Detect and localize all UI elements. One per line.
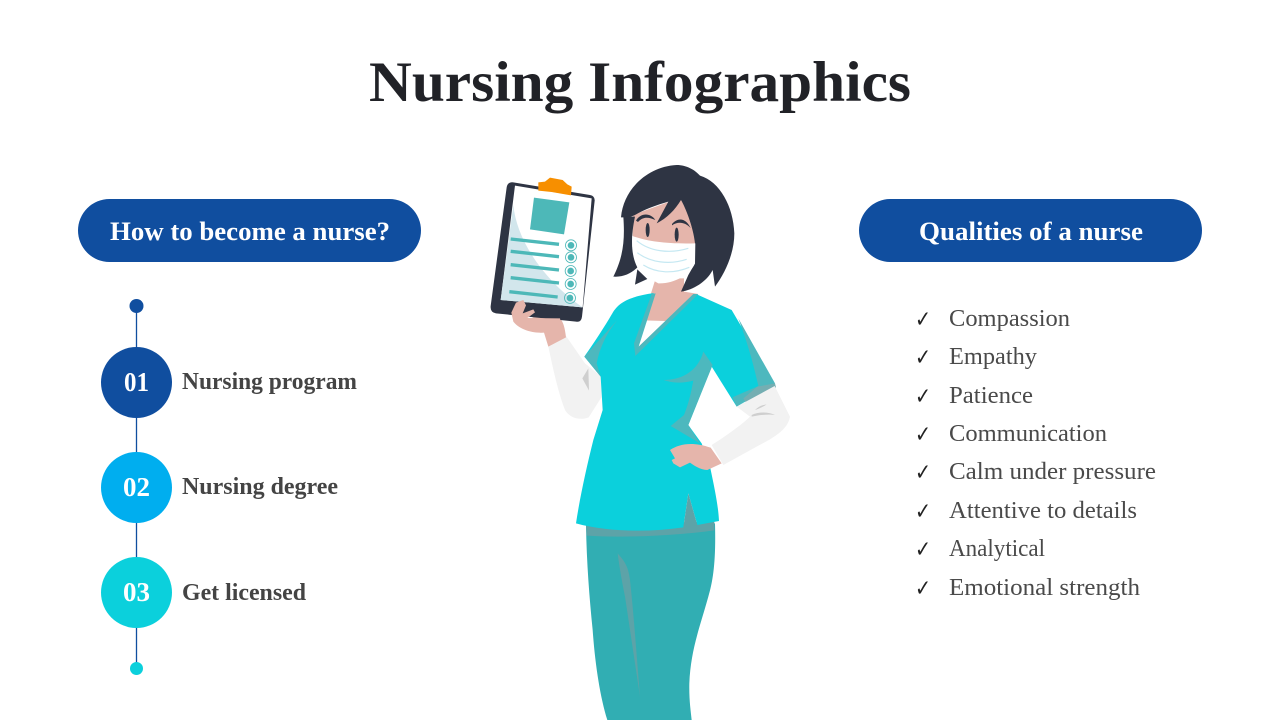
hand on hip [670, 444, 722, 470]
item: analytical [915, 536, 1045, 563]
item: emotional strength: Emotional strength [949, 575, 1140, 601]
title: Nursing Infographics [369, 51, 911, 114]
step 03 [101, 557, 307, 628]
slit shadow [683, 493, 697, 527]
checklist [915, 306, 1156, 602]
left sleeve white [548, 336, 601, 419]
hair [621, 165, 734, 292]
step 03: Get licensed [182, 580, 307, 606]
item: empathy: Empathy [949, 344, 1037, 370]
panel: qualities of a nurse [859, 199, 1202, 602]
fingers [511, 300, 562, 333]
hair strand beside neck [635, 269, 647, 285]
item: communication: Communication [949, 421, 1107, 447]
checkbox circles [564, 240, 576, 303]
item: calm under pressure: ✓ [915, 460, 931, 486]
heading pill: qualities of a nurse [859, 199, 1202, 262]
item: attentive to details: Attentive to details [949, 498, 1137, 524]
pants crease [618, 553, 640, 697]
item: patience: Patience [949, 383, 1033, 409]
item: patience: ✓ [915, 384, 931, 410]
item: compassion: Compassion [949, 306, 1070, 332]
right sleeve shade [732, 318, 775, 407]
item: emotional strength: ✓ [915, 576, 931, 602]
right sleeve folds [752, 404, 775, 417]
clip [538, 178, 572, 195]
pants [586, 523, 715, 720]
item: calm under pressure: Calm under pressure [949, 459, 1156, 485]
item: patience [915, 383, 1033, 410]
holding hand back [520, 316, 566, 347]
step 02: Nursing degree [182, 474, 338, 500]
eyes and brows [636, 215, 691, 242]
white undershirt [639, 320, 665, 347]
hair left lobe [613, 217, 637, 277]
item: communication: ✓ [915, 422, 931, 448]
mask pleats [637, 241, 689, 272]
waist shade [663, 352, 713, 443]
step 01: Nursing program [182, 369, 357, 395]
form lines [509, 239, 559, 297]
timeline line and end dots [130, 299, 144, 675]
photo square [530, 198, 569, 234]
waistband shadow [586, 522, 714, 537]
paper shade [501, 205, 583, 307]
step 01 [101, 347, 357, 418]
right sleeve white [712, 386, 790, 465]
step 01: 01 [124, 367, 149, 397]
heading pill: qualities of a nurse: Qualities of a nurse [919, 217, 1143, 246]
step 02 [101, 452, 338, 523]
item: attentive to details: ✓ [915, 499, 931, 525]
left sleeve shade [584, 320, 617, 377]
paper [501, 186, 592, 307]
item: empathy: ✓ [915, 345, 931, 371]
cuff band [743, 383, 776, 404]
item: analytical: Analytical [949, 536, 1045, 562]
scrub top [576, 293, 775, 531]
illustration: nurse holding clipboard [491, 165, 790, 720]
item: compassion: ✓ [915, 307, 931, 333]
collar trim [634, 293, 698, 356]
step 03: 03 [123, 577, 150, 607]
item: empathy [915, 344, 1037, 371]
heading pill: how to become a nurse: How to become a nurse? [110, 217, 390, 246]
panel: how to become a nurse [78, 199, 421, 675]
clipboard board [491, 182, 595, 322]
face mask [632, 236, 695, 283]
neck and chest [633, 278, 698, 357]
heading pill: how to become a nurse [78, 199, 421, 262]
item: analytical: ✓ [915, 537, 931, 563]
clipboard [491, 178, 595, 322]
left sleeve fold [582, 368, 589, 391]
face [633, 197, 697, 245]
step 02: 02 [123, 472, 150, 502]
